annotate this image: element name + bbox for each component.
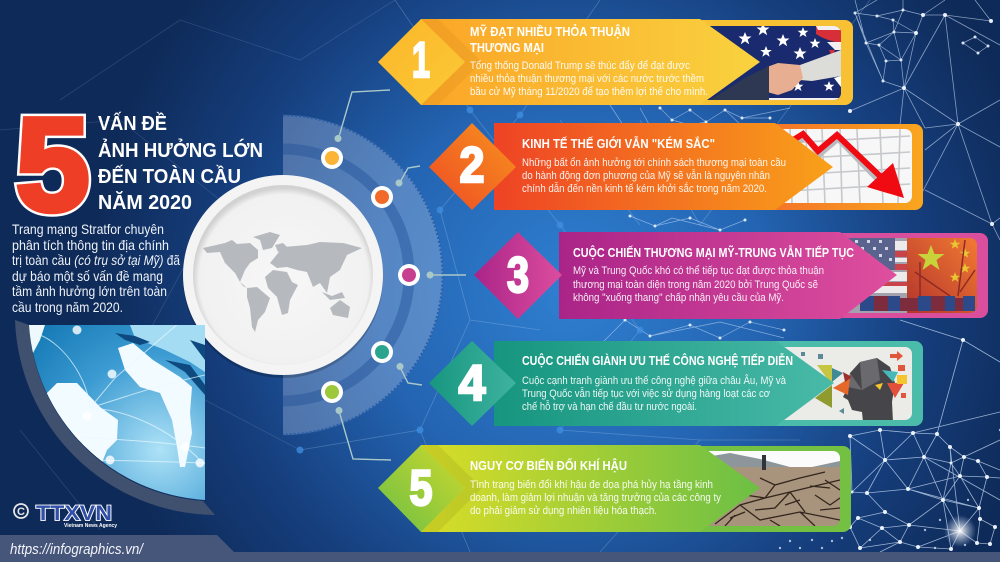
card 4 body: Cuộc cạnh tranh giành ưu thế công nghệ giữa châu Âu, Mỹ và: [522, 374, 787, 387]
logo: TTXVN copyright: C: [17, 506, 25, 518]
card 1 title: THƯƠNG MẠI: [470, 40, 544, 55]
card 1 number: 1: [412, 32, 430, 88]
heading: VẤN ĐỀ: [98, 112, 167, 135]
card 5 title: NGUY CƠ BIẾN ĐỔI KHÍ HẬU: [470, 458, 627, 473]
gear semicircle: [283, 115, 443, 435]
card 4 body: [522, 374, 787, 413]
intro paragraph: cầu trong năm 2020.: [12, 300, 123, 315]
logo: TTXVN copyright: [14, 502, 117, 529]
card 4 arrow: [494, 341, 834, 426]
card 4 back panel and tech head photo: [760, 341, 923, 426]
card 1 back panel and photo: [690, 20, 853, 105]
card 3 back panel and flags photo: [825, 233, 988, 318]
card 1 body: bầu cử Mỹ tháng 11/2020 để tạo thêm lợi thế cho mình.: [470, 86, 708, 98]
card 2 body: [522, 157, 786, 195]
big number 5: 5: [16, 91, 89, 238]
card 2 back panel and chart photo: [760, 124, 923, 210]
logo: TTXVN copyright: TTXVN: [36, 502, 112, 525]
central white disc with world map: [183, 175, 383, 378]
intro paragraph: dự báo một số vấn đề mang: [12, 269, 163, 284]
card 2: [429, 123, 923, 210]
card 2 body: do hành động đơn phương của Mỹ sẽ vẫn là nguyên nhân: [522, 169, 770, 182]
card 5 body: do phải giảm sử dụng nhiên liệu hóa thạch.: [470, 505, 657, 517]
card 2 number: 2: [460, 137, 484, 193]
intro paragraph: phân tích thông tin địa chính: [12, 238, 169, 253]
intro paragraph: trị toàn cầu (có trụ sở tại Mỹ) đã: [12, 253, 180, 268]
card 1 diamond: [378, 19, 465, 105]
card 4 body: Trung Quốc vẫn tiếp tục với việc sử dụng hàng loạt các cơ: [522, 387, 771, 400]
card 3 diamond: [474, 232, 562, 319]
card 3 body: Mỹ và Trung Quốc khó có thể tiếp tục đạt được thỏa thuận: [573, 265, 824, 277]
logo: TTXVN copyright: Vietnam News Agency: [64, 523, 117, 529]
bottom bar: [0, 535, 1000, 562]
intro paragraph: [12, 222, 180, 315]
card 5 body: Tình trạng biến đổi khí hậu đe dọa phá hủy hạ tầng kinh: [470, 479, 713, 491]
globe image with grey ring: [15, 320, 215, 515]
dot: item 2: [371, 186, 393, 208]
card 2 body: Những bất ổn ảnh hưởng tới chính sách thương mại toàn cầu: [522, 157, 786, 169]
dot: item 1: [321, 147, 343, 169]
dot: item 3: [398, 264, 420, 286]
card 3: [474, 232, 988, 319]
card 4 number: 4: [458, 355, 486, 411]
heading: ĐẾN TOÀN CẦU: [98, 165, 241, 188]
card 4 title: CUỘC CHIẾN GIÀNH ƯU THẾ CÔNG NGHỆ TIẾP DIỄN: [522, 353, 793, 368]
card 4 body: chế hỗ trợ và hạn chế đầu tư nước ngoài.: [522, 400, 697, 413]
connector lines: [335, 90, 466, 460]
card 5 diamond: [378, 445, 465, 532]
card 5 number: 5: [410, 460, 432, 516]
card 1 title: [470, 24, 630, 55]
card 3 body: [573, 265, 824, 304]
intro paragraph: Trang mạng Stratfor chuyên: [12, 222, 164, 237]
card 5 arrow: [421, 445, 760, 532]
card 2 arrow: [494, 123, 833, 210]
card 1 body: Tổng thống Donald Trump sẽ thúc đẩy để đạt được: [470, 60, 690, 72]
card 4 diamond: [429, 341, 516, 426]
dot: item 5: [321, 381, 343, 403]
card 5 body: doanh, làm giảm lợi nhuận và tăng trưởng của các công ty: [470, 492, 721, 504]
card 4: [429, 341, 923, 426]
big number 5: 5: [16, 91, 89, 238]
card 3 body: thương mại toàn diện trong năm 2020 bởi Trung Quốc sẽ: [573, 279, 818, 291]
card 3 title: CUỘC CHIẾN THƯƠNG MẠI MỸ-TRUNG VẪN TIẾP TỤC: [573, 245, 854, 260]
card 2 diamond: [429, 123, 516, 210]
card 1 arrow: [421, 19, 760, 105]
dot: item 4: [371, 341, 393, 363]
card 1 title: MỸ ĐẠT NHIỀU THỎA THUẬN: [470, 24, 630, 39]
intro paragraph: tầm ảnh hưởng lớn trên toàn: [12, 284, 167, 299]
source url: https://infographics.vn/: [10, 541, 145, 558]
card 2 title: KINH TẾ THẾ GIỚI VẪN "KÉM SẮC": [522, 136, 715, 151]
card 1 body: [470, 60, 708, 98]
heading: ẢNH HƯỞNG LỚN: [98, 138, 263, 162]
card 3 number: 3: [507, 247, 529, 303]
card 1 body: nhiều thỏa thuận thương mại với các nước trước thềm: [470, 73, 704, 85]
card 2 body: chính dẫn đến nền kinh tế kém khởi sắc trong năm 2020.: [522, 182, 767, 195]
card 5 body: [470, 479, 721, 517]
card 1: [378, 19, 853, 105]
card 3 arrow: [559, 232, 897, 319]
world map: [203, 232, 362, 332]
card 5: [378, 445, 851, 532]
card 5 back panel and cracked earth photo: [690, 446, 851, 532]
heading: [98, 112, 263, 214]
heading: NĂM 2020: [98, 191, 192, 214]
card 3 body: không "xuống thang" chấp nhận yêu cầu của Mỹ.: [573, 292, 784, 304]
